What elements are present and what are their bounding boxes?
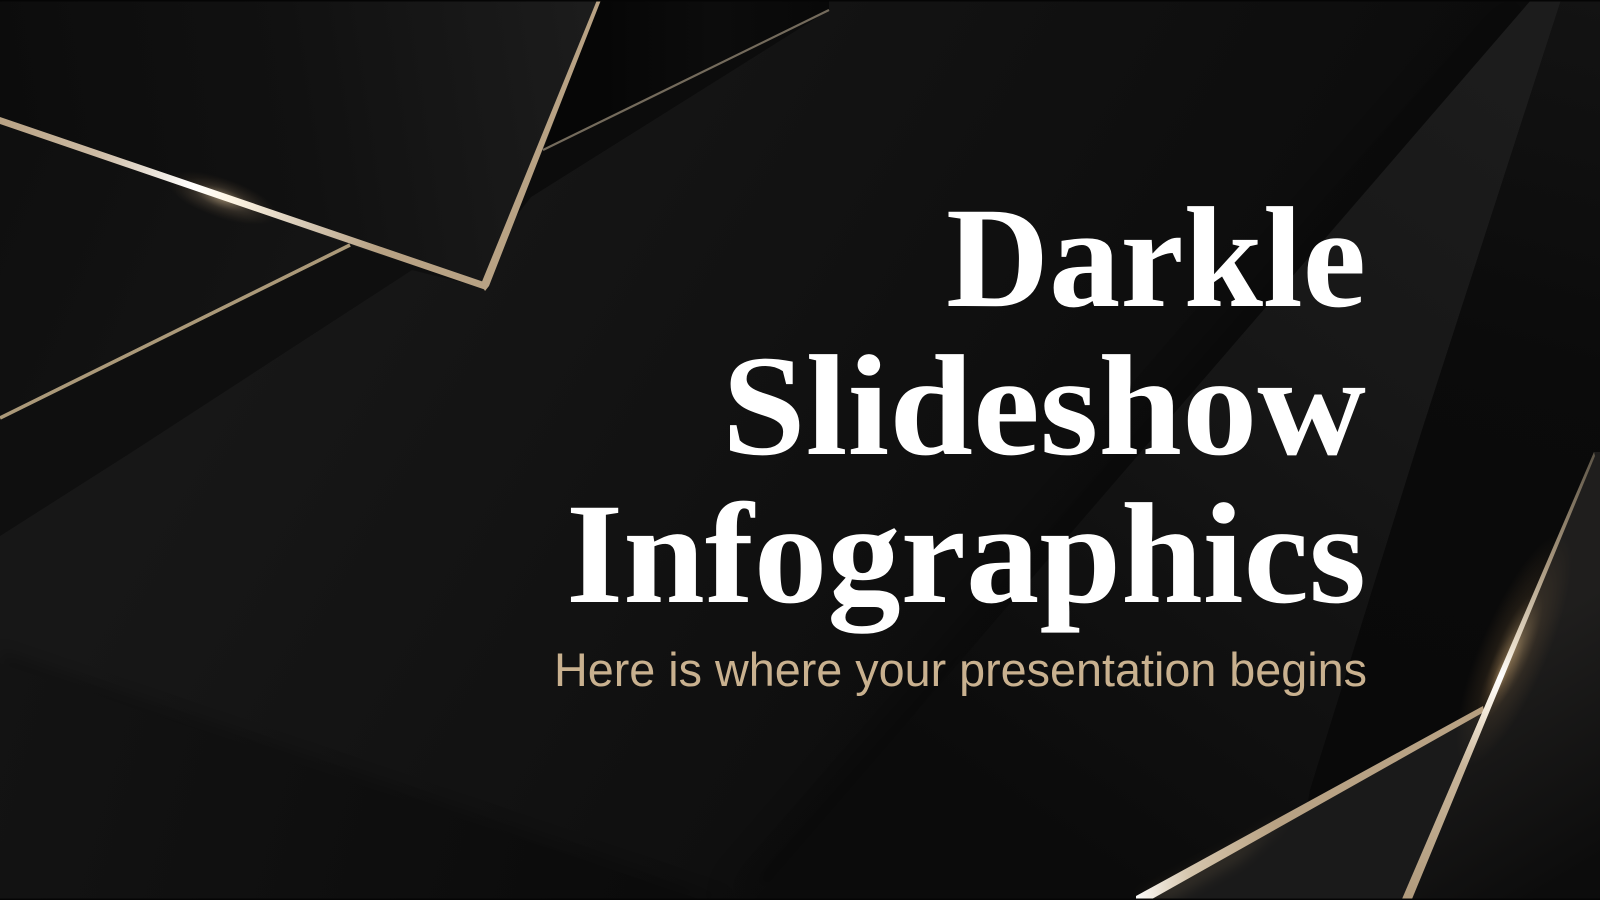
- background: left triangle under top card: [0, 120, 350, 418]
- title line: Infographics: Infographics: [566, 475, 1366, 634]
- line: thin upper gold line: [543, 10, 829, 150]
- background: shadow under thin top line: [505, 10, 829, 230]
- background: shadow strip beside top card: [543, 0, 829, 150]
- subtitle: Here is where your presentation begins: [554, 643, 1367, 696]
- background: right diagonal light wedge: [730, 0, 1561, 899]
- title line: Slideshow: Slideshow: [722, 327, 1366, 486]
- title: [566, 179, 1366, 634]
- glow: right light flare: [1434, 522, 1594, 778]
- title line: Darkle: Darkle: [946, 179, 1366, 338]
- card: bottom-right right facet: [1403, 452, 1600, 899]
- glow: top-left light flare: [161, 160, 283, 236]
- card: top-left panel: [0, 0, 600, 288]
- glow: bright flare core: [180, 187, 265, 214]
- glow: bottom line flare: [1136, 815, 1290, 899]
- background: left shadow band: [0, 245, 485, 536]
- line: bottom gold line: [1136, 706, 1484, 899]
- line: right apex gold line: [1402, 452, 1595, 899]
- background: bottom-left plane: [0, 650, 730, 899]
- line: top card bottom edge with highlight: [0, 117, 486, 290]
- card: bottom-right left facet: [1136, 709, 1483, 899]
- line: lower-left gold line: [0, 245, 350, 418]
- line: top card right edge: [481, 0, 601, 291]
- background: right dark plane: [1300, 0, 1600, 899]
